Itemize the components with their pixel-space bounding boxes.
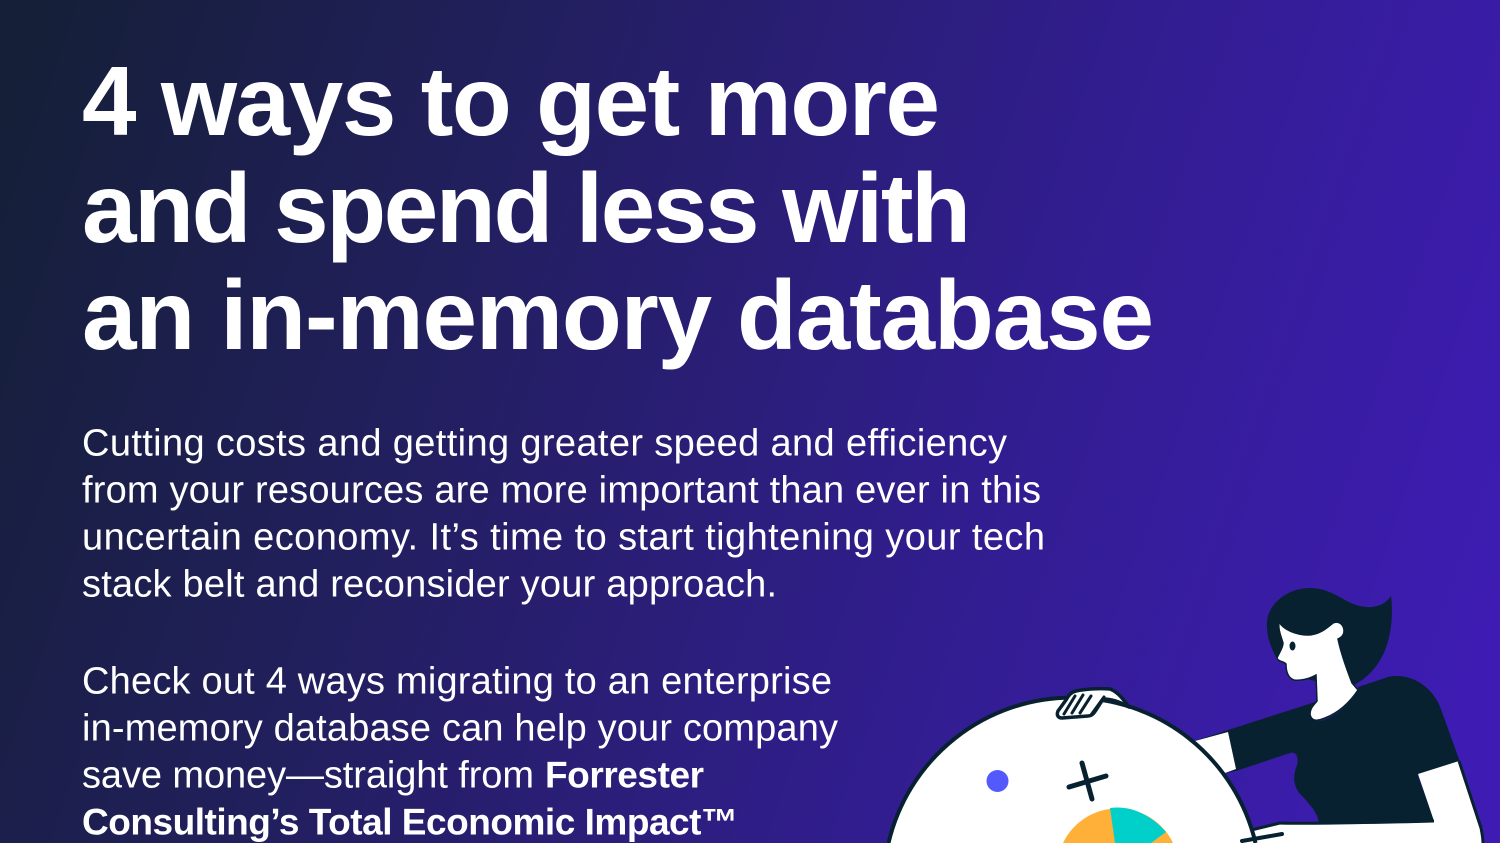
second paragraph: Consulting’s Total Economic Impact™ [82,802,738,842]
hand on circle [1057,689,1129,718]
intro paragraph: Cutting costs and getting greater speed and efficiency [82,422,1007,464]
blue dot [986,770,1008,792]
second paragraph: save money—straight from [82,754,534,796]
woman far arm and hand [1233,761,1483,843]
second paragraph [82,660,838,842]
woman near arm [1195,732,1236,773]
woman eye [1290,642,1296,650]
title: and spend less with [82,153,971,263]
second paragraph: Forrester [545,754,704,796]
pie chart [1063,808,1173,843]
plus mark [1069,763,1106,799]
woman face and neck [1277,622,1358,720]
title: an in-memory database [82,260,1154,370]
title [82,46,1154,370]
intro paragraph: uncertain economy. It’s time to start tightening your tech [82,516,1045,558]
chart circle [888,698,1256,843]
intro paragraph [82,422,1045,606]
illustration: woman leaning on chart circle [888,588,1483,843]
second paragraph: in-memory database can help your company [82,708,838,750]
pointing hand [1242,834,1282,841]
woman shirt [1194,676,1460,825]
intro paragraph: from your resources are more important than ever in this [82,470,1041,512]
title: 4 ways to get more [82,46,940,156]
intro paragraph: stack belt and reconsider your approach. [82,564,777,606]
woman hair [1267,588,1392,686]
second paragraph: Check out 4 ways migrating to an enterprise [82,660,832,702]
